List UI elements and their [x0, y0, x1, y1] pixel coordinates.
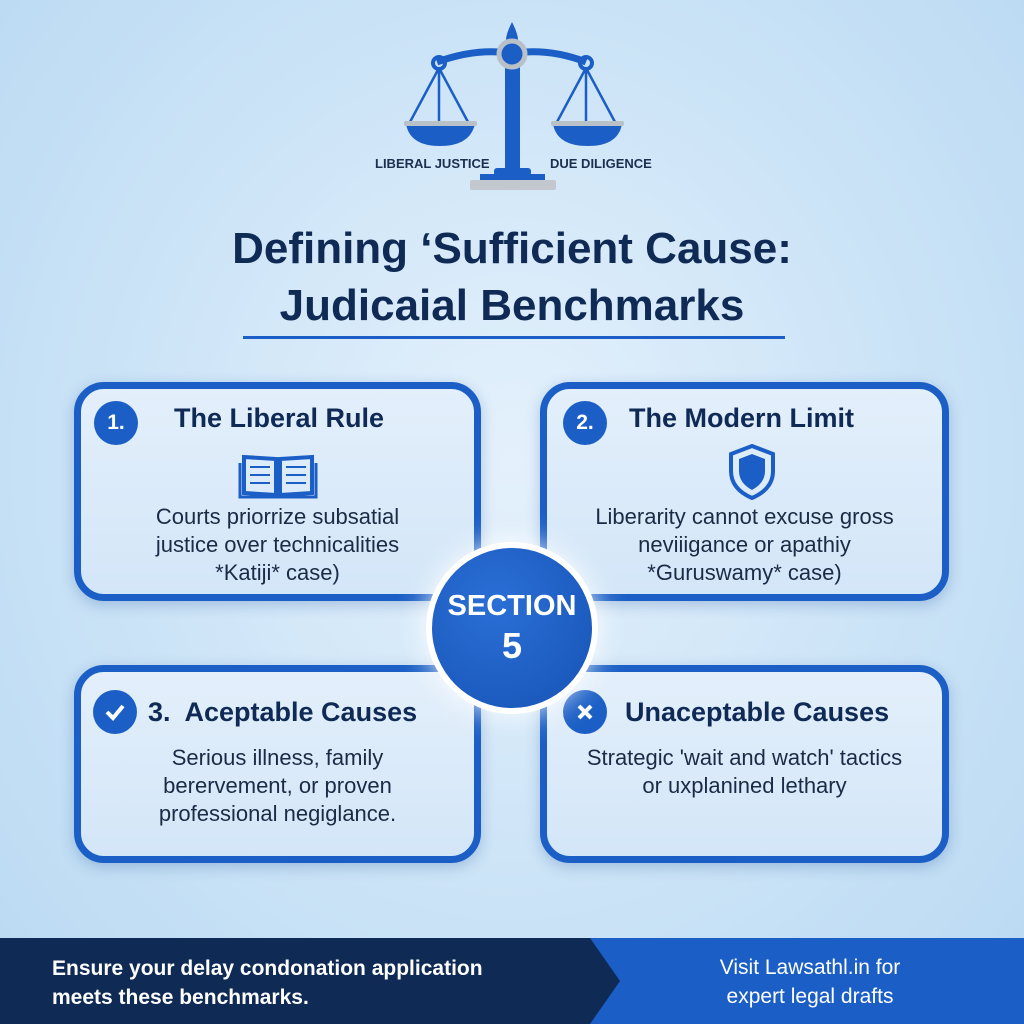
body text: or uxplanined lethary [642, 773, 847, 798]
body text [159, 745, 396, 826]
body text: neviiigance or apathiy [638, 532, 851, 557]
title [232, 224, 792, 330]
panel: acceptable causes [74, 665, 481, 863]
body text: Strategic 'wait and watch' tactics [587, 745, 902, 770]
footer left call to action [0, 938, 620, 1024]
panel: unacceptable causes [540, 665, 949, 863]
heading: The Modern Limit [629, 403, 854, 433]
badge 2: 2. [576, 411, 594, 434]
body text: Liberarity cannot excuse gross [595, 504, 894, 529]
heading: Unaceptable Causes [625, 697, 889, 727]
heading: The Liberal Rule [174, 403, 384, 433]
center badge: section 5: SECTION [448, 590, 576, 622]
footer right link [720, 956, 900, 1008]
body text: professional negiglance. [159, 801, 396, 826]
badge 1 [94, 401, 138, 445]
icon: check [93, 690, 137, 734]
footer left call to action: meets these benchmarks. [52, 986, 309, 1009]
body text [587, 745, 902, 798]
panel: the modern limit [540, 382, 949, 601]
title: Defining ‘Sufficient Cause: [232, 224, 792, 273]
body text: *Katiji* case) [215, 560, 340, 585]
center badge: section 5: 5 [502, 625, 522, 666]
body text: Serious illness, family [172, 745, 383, 770]
icon: scales of justice [375, 22, 652, 190]
icon: book [238, 454, 318, 498]
heading: 3. Aceptable Causes [148, 697, 417, 727]
title underline [243, 336, 785, 339]
footer banner [0, 938, 1024, 1024]
body text: *Guruswamy* case) [647, 560, 842, 585]
body text: justice over technicalities [156, 532, 399, 557]
badge 2 [563, 401, 607, 445]
footer right link: expert legal drafts [727, 985, 893, 1008]
footer left call to action: Ensure your delay condonation application [52, 957, 483, 980]
body text: Courts priorrize subsatial [156, 504, 399, 529]
body text: berervement, or proven [163, 773, 392, 798]
icon: shield [729, 444, 775, 500]
icon: x [563, 690, 607, 734]
icon: scales of justice: LIBERAL JUSTICE [375, 156, 490, 171]
center badge: section 5 [426, 542, 598, 714]
footer right link: Visit Lawsathl.in for [720, 956, 900, 979]
badge 1: 1. [107, 411, 125, 434]
icon: scales of justice: DUE DILIGENCE [550, 156, 652, 171]
title: Judicaial Benchmarks [280, 281, 744, 330]
body text [595, 504, 894, 585]
panel: the liberal rule [74, 382, 481, 601]
body text [155, 504, 399, 585]
